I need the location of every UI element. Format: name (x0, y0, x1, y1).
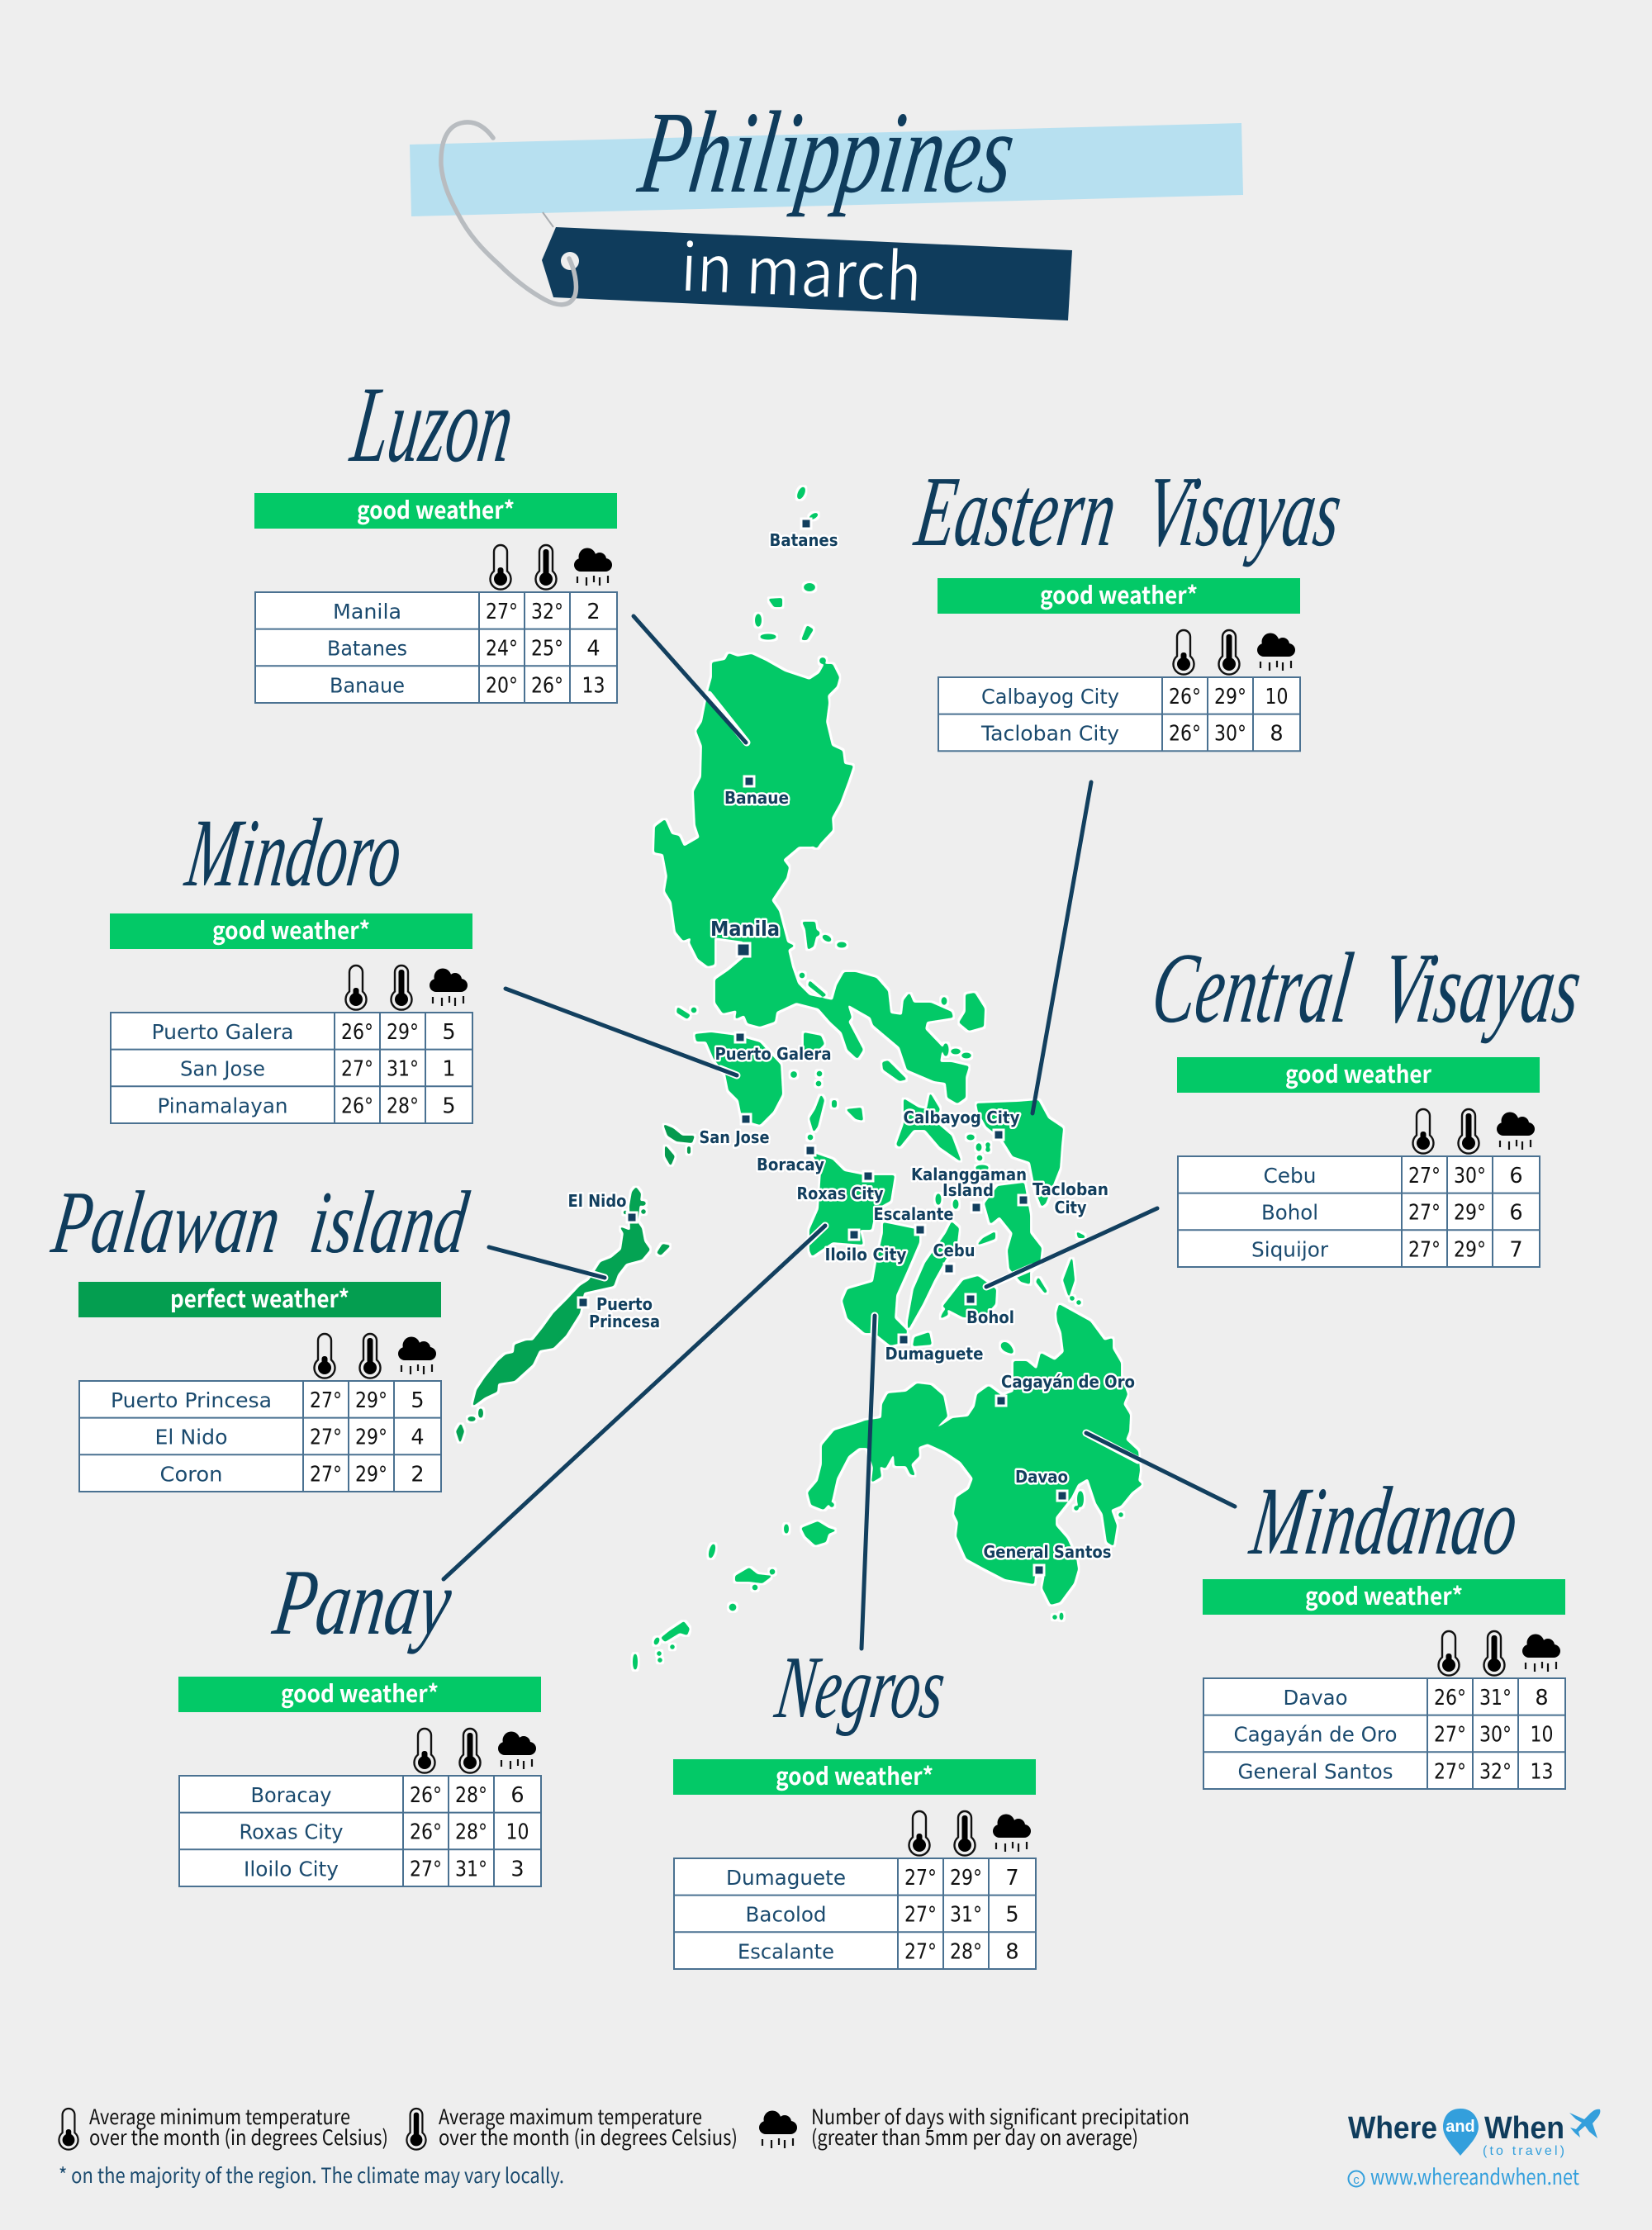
icon: rain (498, 1731, 536, 1769)
table: 29° (355, 1462, 387, 1487)
label: Manila: Manila (710, 917, 780, 941)
table: 29° (1214, 685, 1246, 709)
heading: Mindoro: Mindoro (179, 799, 409, 907)
table: 27° (904, 1866, 937, 1891)
table: Escalante (738, 1939, 834, 1963)
table: 29° (1454, 1237, 1486, 1262)
northern islands (755, 486, 826, 848)
table: Davao (1284, 1686, 1348, 1710)
marker: Dumaguete (899, 1335, 909, 1345)
marker: Roxas City (863, 1171, 873, 1181)
table: 29° (355, 1426, 387, 1450)
weather band (178, 1677, 541, 1712)
table: 32° (1479, 1759, 1512, 1784)
heading: Panay: Panay (268, 1549, 458, 1654)
legend text: min temperature line 2: over the month (in degrees Celsius) (89, 2122, 388, 2152)
table: 27° (1434, 1723, 1466, 1748)
label: Puerto: Puerto (596, 1294, 653, 1314)
icon: rain (1257, 633, 1295, 671)
table: San Jose (180, 1057, 265, 1081)
table: 31° (387, 1057, 419, 1082)
table: 5 (411, 1388, 425, 1413)
logo text: When: When (1484, 2111, 1564, 2146)
table: 31° (1479, 1686, 1512, 1710)
table: Roxas City (240, 1820, 344, 1844)
table: 2 (411, 1462, 425, 1487)
icon: min temperature (415, 1729, 434, 1773)
table: 8 (1005, 1939, 1019, 1964)
table: 20° (486, 673, 518, 698)
icon: min temperature (491, 545, 510, 590)
table: Batanes (327, 637, 407, 661)
connector: Panay (444, 1226, 825, 1579)
panel: Panay (178, 1675, 541, 1886)
marker: Batanes (801, 519, 811, 529)
table: 3 (510, 1857, 525, 1881)
icon: rain (398, 1336, 436, 1374)
table: 28° (950, 1939, 982, 1964)
table: Manila (333, 600, 401, 624)
marker: Cebu (944, 1264, 954, 1274)
legend icon: min temperature (59, 2109, 78, 2150)
weather band (110, 913, 472, 949)
table: 27° (1434, 1759, 1466, 1784)
label: Boracay: Boracay (757, 1155, 824, 1174)
table: 13 (582, 673, 605, 698)
table: 31° (950, 1903, 982, 1928)
table: Boracay (251, 1783, 332, 1807)
marker: General Santos (1034, 1565, 1044, 1575)
table: 26° (410, 1783, 442, 1808)
table: 29° (1454, 1201, 1486, 1226)
connector: Palawan (489, 1247, 605, 1278)
icon: rain (574, 548, 612, 586)
label: San Jose: San Jose (699, 1127, 770, 1147)
label: El Nido: El Nido (568, 1191, 626, 1211)
table: 30° (1479, 1723, 1512, 1748)
central islands (676, 922, 1085, 1346)
heading: Luzon: Luzon (344, 364, 521, 485)
marker: Bohol (966, 1294, 976, 1304)
table: 27° (341, 1057, 373, 1082)
label: Dumaguete: Dumaguete (885, 1344, 983, 1364)
table: 27° (904, 1939, 937, 1964)
label: Roxas City: Roxas City (796, 1184, 884, 1203)
logo text: to travel: (to travel) (1483, 2144, 1564, 2158)
connector: Mindanao (1086, 1433, 1235, 1506)
table: 6 (1509, 1201, 1523, 1226)
label: Calbayog City: Calbayog City (904, 1108, 1019, 1127)
table (1203, 1678, 1565, 1789)
table: Banaue (330, 673, 405, 697)
icon: max temperature (1483, 1631, 1505, 1676)
marker: San Jose (741, 1114, 751, 1124)
table (179, 1776, 541, 1886)
table: 10 (1265, 685, 1289, 709)
table: 27° (310, 1426, 342, 1450)
luggage tag (542, 227, 1072, 320)
table (111, 1013, 472, 1123)
icon: rain (430, 968, 468, 1006)
band text: good weather* (357, 491, 515, 526)
label: Tacloban: Tacloban (1032, 1179, 1108, 1199)
table: 28° (387, 1094, 419, 1118)
legend text: max temperature: Average maximum temperature (439, 2101, 702, 2131)
icon: max temperature (392, 966, 411, 1010)
logo pin (1443, 2109, 1479, 2156)
label: Davao: Davao (1015, 1467, 1068, 1487)
table: 7 (1509, 1237, 1523, 1262)
band text: good weather* (1040, 576, 1198, 611)
table: 29° (355, 1388, 387, 1413)
icon: max temperature (535, 545, 557, 590)
connector: Central Visayas (986, 1208, 1157, 1287)
band text: good weather (1285, 1056, 1431, 1090)
label: Cebu: Cebu (933, 1241, 975, 1260)
table (938, 677, 1300, 751)
table: 30° (1214, 722, 1246, 747)
marker: Calbayog City (994, 1130, 1004, 1140)
logo text: and: and (1446, 2118, 1475, 2136)
connector: Luzon (634, 616, 747, 743)
table: 26° (410, 1820, 442, 1845)
label: Kalanggaman Island: Kalanggaman (911, 1165, 1027, 1184)
table: 28° (455, 1783, 487, 1808)
table (255, 592, 617, 703)
label: Bohol: Bohol (966, 1307, 1014, 1327)
table: 4 (411, 1426, 425, 1450)
label: Batanes: Batanes (770, 530, 838, 550)
footnote: * on the majority of the region. The climate may vary locally. (59, 2160, 564, 2190)
string thin part (543, 212, 553, 227)
heading: Negros: Negros (770, 1638, 951, 1737)
table: 26° (1169, 722, 1201, 747)
table: 6 (1509, 1164, 1523, 1189)
icon: max temperature (1219, 630, 1239, 675)
band text: good weather* (281, 1675, 439, 1710)
marker: Cagayán de Oro (996, 1396, 1006, 1406)
marker: Puerto Galera (735, 1032, 745, 1042)
table: 1 (442, 1057, 456, 1082)
table: Puerto Princesa (111, 1388, 272, 1412)
icon: min temperature (909, 1811, 930, 1856)
connector: Mindoro (506, 989, 737, 1075)
table: 27° (410, 1857, 442, 1881)
Palawan (perfect weather) (456, 1124, 695, 1444)
table: 10 (1530, 1723, 1553, 1748)
label: General Santos: General Santos (983, 1542, 1112, 1562)
logo (1348, 2109, 1600, 2191)
table: Bacolod (745, 1903, 826, 1927)
table: 28° (455, 1820, 487, 1845)
table: 26° (341, 1094, 373, 1118)
icon: min temperature (1439, 1631, 1459, 1676)
table: 2 (586, 600, 601, 624)
table: Coron (160, 1462, 223, 1486)
table: 5 (442, 1020, 456, 1045)
table: 27° (310, 1462, 342, 1487)
table: 6 (510, 1783, 525, 1808)
subtitle: in march: in march (679, 215, 924, 321)
tag hole (561, 252, 579, 270)
heading: Mindanao: Mindanao (1244, 1467, 1525, 1575)
icon: max temperature (459, 1729, 481, 1773)
table: Cagayán de Oro (1234, 1723, 1398, 1747)
table: 26° (1169, 685, 1201, 709)
weather band (673, 1759, 1036, 1795)
website: www.whereandwhen.net (1370, 2161, 1579, 2191)
connector: Negros (862, 1316, 875, 1649)
table (79, 1381, 441, 1492)
marker: Banaue (744, 776, 754, 786)
connector: Eastern Visayas (1032, 782, 1091, 1113)
table: Dumaguete (726, 1866, 846, 1890)
marker: Puerto Princesa (578, 1298, 588, 1307)
icon: min temperature (1173, 630, 1194, 675)
title blue band (410, 123, 1243, 216)
copyright icon (1348, 2171, 1365, 2187)
table: 27° (904, 1903, 937, 1928)
marker: Tacloban City (1018, 1195, 1028, 1205)
icon: min temperature (345, 966, 367, 1010)
panel: Mindoro (110, 912, 472, 1123)
table: 29° (950, 1866, 982, 1891)
band text: perfect weather* (170, 1280, 349, 1315)
title block (410, 88, 1243, 321)
copyright icon: c (1353, 2173, 1360, 2187)
marker: Escalante (915, 1225, 925, 1235)
table: 5 (442, 1094, 456, 1118)
table: 30° (1454, 1164, 1486, 1189)
table: El Nido (155, 1426, 228, 1450)
table: 24° (486, 637, 518, 662)
panel: Luzon (254, 491, 617, 703)
icon: min temperature (1412, 1109, 1434, 1154)
heading: Philippines: Philippines (632, 88, 1023, 217)
table: Puerto Galera (152, 1020, 294, 1044)
table: 27° (486, 600, 518, 624)
table: 26° (341, 1020, 373, 1045)
panel: Negros (673, 1758, 1036, 1969)
table: Tacloban City (980, 722, 1119, 746)
legend (59, 2101, 1189, 2190)
legend text: min temperature: Average minimum temperature (89, 2101, 350, 2131)
table: Cebu (1264, 1164, 1317, 1188)
marker: El Nido (627, 1212, 637, 1222)
table: 27° (1408, 1201, 1441, 1226)
marker: Davao (1057, 1491, 1067, 1501)
table: Bohol (1261, 1201, 1318, 1225)
weather band (1177, 1057, 1540, 1093)
panel: Mindanao (1203, 1578, 1565, 1789)
band text: good weather* (776, 1758, 933, 1792)
icon: rain (1497, 1112, 1535, 1150)
icon: rain (993, 1814, 1031, 1852)
label: City: City (1054, 1198, 1087, 1217)
marker: Boracay (805, 1146, 815, 1155)
heading: Eastern Visayas: Eastern Visayas (909, 456, 1348, 567)
weather band (254, 493, 617, 529)
table: 31° (455, 1857, 487, 1881)
table: 27° (310, 1388, 342, 1413)
map markers and labels (568, 519, 1135, 1575)
band text: good weather* (212, 912, 370, 947)
panel: Eastern Visayas (938, 576, 1300, 751)
table: 5 (1005, 1903, 1019, 1928)
table: Calbayog City (981, 685, 1119, 709)
legend text: rain line 2: (greater than 5mm per day on average) (811, 2122, 1138, 2152)
icon: min temperature (314, 1334, 335, 1378)
southern islands (633, 1342, 1123, 1670)
legend icon: rain (759, 2111, 797, 2148)
table: General Santos (1237, 1759, 1393, 1783)
Mindanao (808, 1304, 1142, 1605)
table: 32° (531, 600, 563, 624)
legend text: max temperature line 2: over the month (in degrees Celsius) (439, 2122, 738, 2152)
tag string loop (441, 122, 576, 305)
label: Island: Island (942, 1180, 994, 1200)
band text: good weather* (1305, 1578, 1463, 1612)
table: 27° (1408, 1164, 1441, 1189)
table: 25° (531, 637, 563, 662)
marker: Kalanggaman Island (971, 1203, 981, 1212)
table: 13 (1530, 1759, 1553, 1784)
icon: max temperature (1459, 1109, 1479, 1154)
logo text: Where: Where (1348, 2111, 1437, 2146)
table: 29° (387, 1020, 419, 1045)
table (1178, 1156, 1540, 1267)
table: 8 (1270, 722, 1284, 747)
Luzon (654, 653, 969, 1103)
table: 8 (1535, 1686, 1549, 1710)
table: 10 (506, 1820, 529, 1845)
label: Banaue: Banaue (724, 788, 789, 808)
label: Escalante: Escalante (874, 1204, 953, 1224)
panel: Palawan (78, 1280, 441, 1492)
label: Iloilo City: Iloilo City (824, 1245, 907, 1264)
table: 27° (1408, 1237, 1441, 1262)
map of the Philippines (456, 486, 1142, 1670)
table: Iloilo City (244, 1857, 339, 1881)
icon: rain (1522, 1634, 1560, 1672)
table: 26° (531, 673, 563, 698)
marker: Manila (737, 943, 750, 956)
table: 26° (1434, 1686, 1466, 1710)
weather band (938, 578, 1300, 614)
weather band (78, 1282, 441, 1317)
label: Princesa: Princesa (589, 1312, 660, 1331)
legend text: rain: Number of days with significant precipitation (811, 2101, 1189, 2131)
table: 7 (1005, 1866, 1019, 1891)
label: Cagayán de Oro: Cagayán de Oro (1001, 1372, 1135, 1392)
icon: max temperature (360, 1334, 380, 1378)
panel: Central Visayas (1177, 1056, 1540, 1267)
heading: Palawan island: Palawan island (46, 1173, 474, 1272)
weather band (1203, 1579, 1565, 1615)
legend icon: max temperature (406, 2109, 426, 2150)
label: Puerto Galera: Puerto Galera (715, 1044, 831, 1064)
icon: max temperature (955, 1811, 975, 1856)
table: Pinamalayan (157, 1094, 287, 1117)
table (674, 1858, 1036, 1969)
table: Siquijor (1251, 1237, 1329, 1261)
logo icon: plane (1569, 2109, 1600, 2138)
table: 4 (586, 637, 601, 662)
marker: Iloilo City (849, 1230, 859, 1240)
